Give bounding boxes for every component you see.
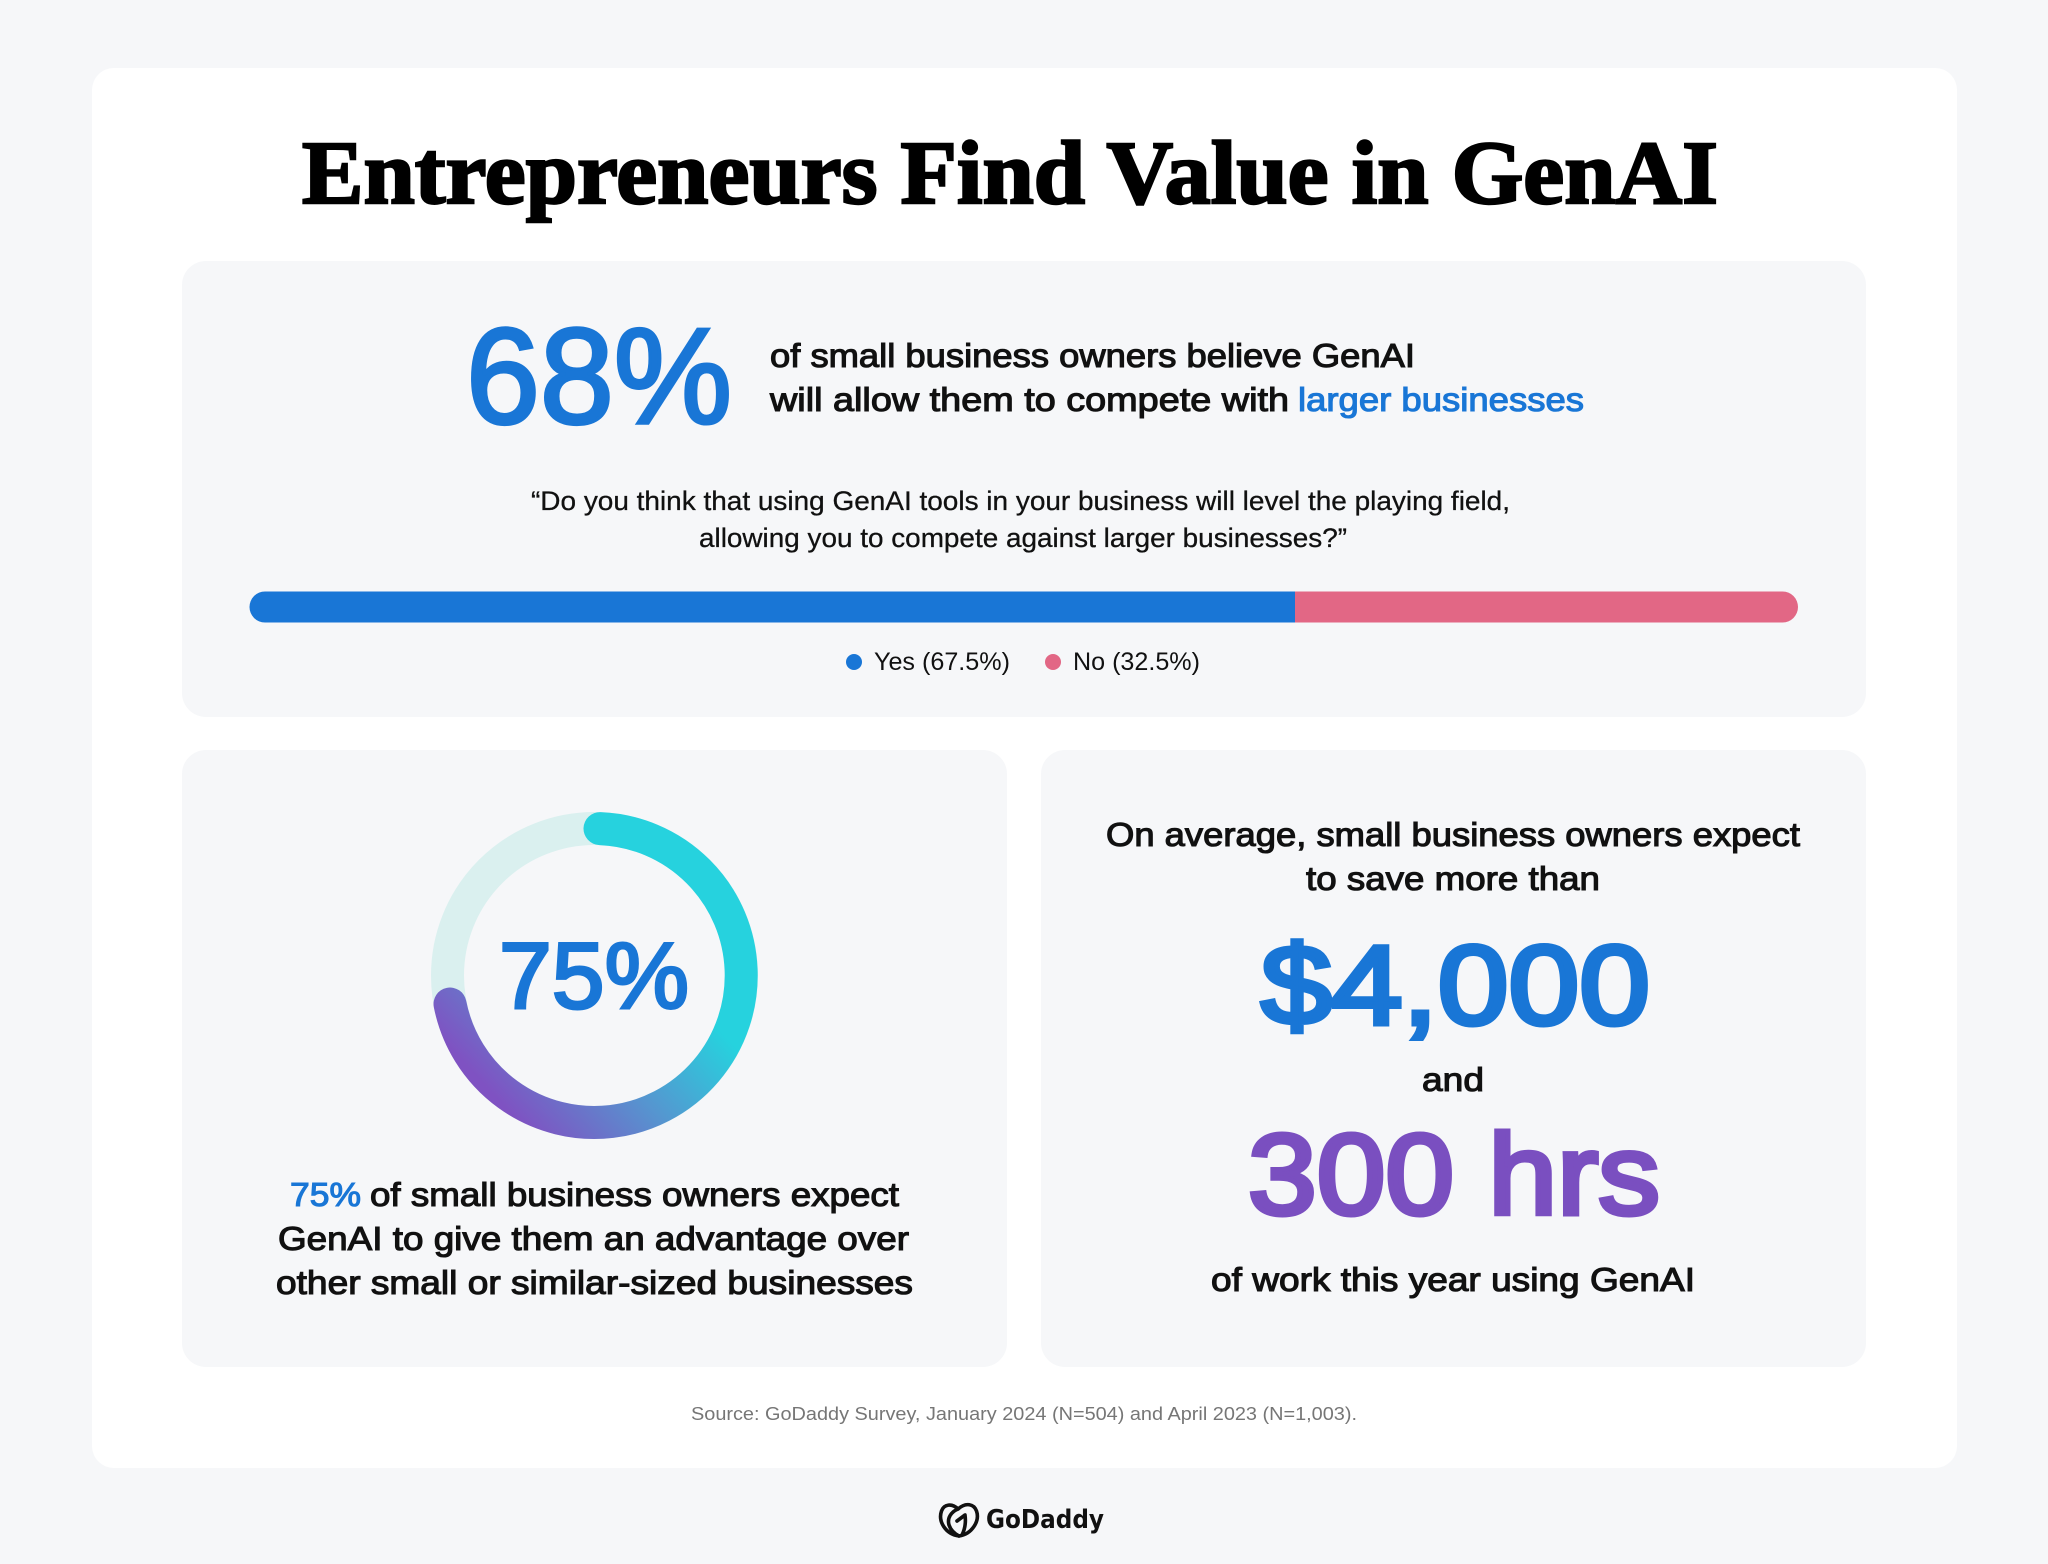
survey question: “Do you think that using GenAI tools in your business will level the playing field, bbox=[531, 486, 1510, 516]
advantage text: GenAI to give them an advantage over bbox=[278, 1220, 909, 1257]
savings intro: to save more than bbox=[1306, 860, 1600, 897]
statement bbox=[769, 337, 1584, 418]
savings intro bbox=[1106, 816, 1800, 897]
title: Entrepreneurs Find Value in GenAI bbox=[302, 124, 1718, 223]
big stat: 300 hrs: 300 hrs bbox=[1248, 1112, 1660, 1239]
connector word: and bbox=[1422, 1061, 1484, 1098]
advantage text: other small or similar-sized businesses bbox=[276, 1264, 913, 1301]
advantage text bbox=[276, 1176, 913, 1301]
statement: will allow them to compete with bbox=[769, 381, 1289, 418]
statement: larger businesses bbox=[1298, 381, 1584, 418]
logo: GoDaddy bbox=[941, 1505, 1104, 1536]
legend: Yes (67.5%) bbox=[874, 648, 1010, 676]
donut chart: 75% bbox=[448, 828, 742, 1122]
big stat: $4,000: $4,000 bbox=[1261, 923, 1650, 1048]
stacked bar: yes vs no bbox=[249, 592, 1798, 622]
icon: heart bbox=[941, 1505, 977, 1536]
statement: of small business owners believe GenAI bbox=[770, 337, 1415, 374]
source note: Source: GoDaddy Survey, January 2024 (N=504) and April 2023 (N=1,003). bbox=[691, 1403, 1357, 1424]
legend bbox=[846, 648, 1200, 676]
savings intro: On average, small business owners expect bbox=[1106, 816, 1800, 853]
panel: level the playing field bbox=[182, 261, 1866, 717]
advantage text: of small business owners expect bbox=[370, 1176, 899, 1213]
big stat: 68%: 68% bbox=[466, 300, 732, 452]
panel: savings bbox=[1041, 750, 1866, 1367]
advantage text: 75% bbox=[290, 1176, 361, 1213]
savings closing text: of work this year using GenAI bbox=[1211, 1261, 1695, 1298]
survey question bbox=[531, 486, 1510, 553]
donut chart: 75%: 75% bbox=[499, 923, 689, 1028]
survey question: allowing you to compete against larger businesses?” bbox=[699, 523, 1347, 553]
logo: GoDaddy: GoDaddy bbox=[986, 1505, 1104, 1535]
legend: No (32.5%) bbox=[1073, 648, 1200, 676]
panel: advantage bbox=[182, 750, 1007, 1367]
